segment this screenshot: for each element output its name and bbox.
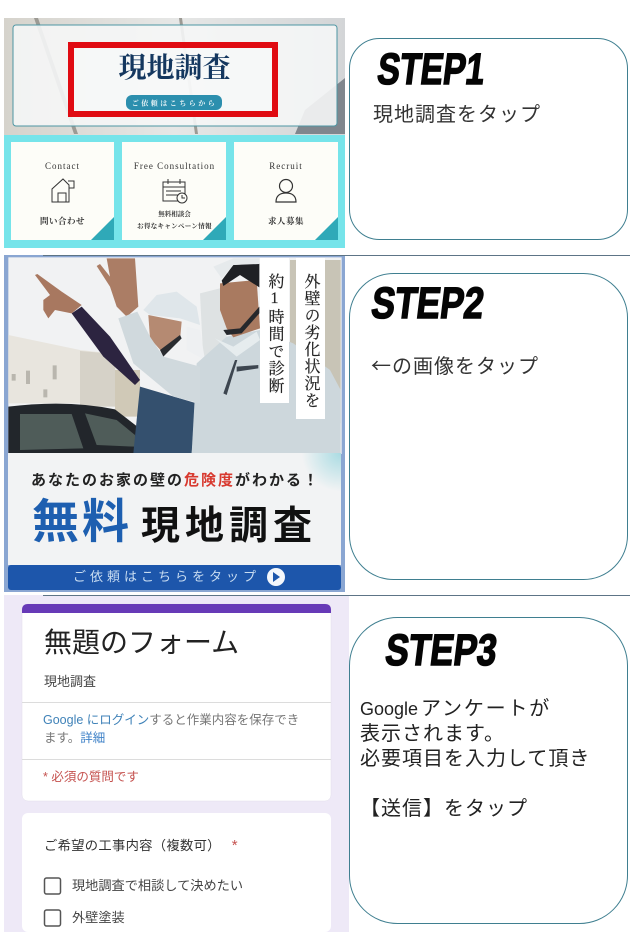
heading: STEP3: STEP3 [383, 626, 500, 675]
icon: house [52, 179, 74, 202]
text: instruction: ←の画像をタップ [371, 350, 539, 379]
banner button [126, 95, 222, 110]
text: instruction: 現地調査をタップ [373, 103, 541, 126]
card: contact: 問い合わせ [40, 216, 85, 226]
vertical label: wall deterioration [296, 258, 325, 419]
vertical label: wall deterioration: 外壁の劣化状況を [302, 273, 320, 409]
headline block: 現地調査 [141, 505, 317, 548]
icon: calendar [163, 179, 187, 203]
banner button: ご依頼はこちらから [132, 98, 217, 108]
text: instructions: 表示されます。 [360, 722, 505, 745]
card: recruit: Recruit [269, 161, 303, 171]
photo: workers pointing [8, 257, 342, 454]
card: contact: Contact [45, 161, 80, 171]
checkbox option 1: 現地調査で相談して決めたい [72, 878, 243, 893]
icon: person [276, 180, 296, 202]
callout: step 1 [350, 38, 628, 240]
call to action bar: ご依頼はこちらをタップ [73, 569, 260, 584]
callout: step 3 [350, 618, 628, 924]
panel: step 3 Google form screenshot [4, 595, 349, 932]
text: instructions: 【送信】をタップ [360, 797, 528, 820]
form header card [22, 604, 331, 801]
hero banner photo [4, 18, 345, 135]
text: instructions: 必要項目を入力して頂き [360, 747, 590, 770]
heading: STEP1: STEP1 [375, 45, 488, 94]
headline block: 無料 [32, 495, 132, 548]
headline block [8, 453, 341, 565]
card: free consultation [122, 142, 226, 240]
vertical label: one hour diagnosis: 約1時間で診断 [266, 273, 284, 394]
headline block: あなたのお家の壁の危険度がわかる！ [31, 471, 320, 489]
checkbox option 2: 外壁塗装 [72, 910, 125, 925]
vertical label: one hour diagnosis [260, 258, 289, 403]
panel: step 2 free survey banner [4, 255, 345, 592]
card: free consultation: Free Consultation [134, 161, 215, 171]
card: recruit: 求人募集 [268, 216, 304, 226]
card: recruit [234, 142, 338, 240]
red highlight box with banner title [71, 45, 275, 114]
text: instructions: Googleアンケートが [360, 697, 551, 720]
form header card: ます。詳細 [44, 730, 105, 745]
card: free consultation: 無料相談会 [158, 209, 191, 218]
form header card: 無題のフォーム [44, 627, 239, 658]
question card [22, 813, 331, 932]
callout: step 2 [350, 274, 628, 580]
form header card: Google にログインすると作業内容を保存でき [43, 712, 299, 727]
form header card: * 必須の質問です [43, 769, 139, 784]
card: contact [11, 142, 114, 240]
red highlight box with banner title: 現地調査 [118, 52, 230, 84]
call to action bar [8, 565, 341, 590]
heading: STEP2: STEP2 [369, 279, 487, 328]
divider lines [43, 256, 630, 596]
icon: play button [267, 568, 285, 586]
card: free consultation: お得なキャンペーン情報 [137, 221, 212, 230]
menu background [4, 135, 345, 248]
form header card: 現地調査 [44, 674, 96, 689]
checkbox option 2 [44, 910, 125, 926]
question card: ご希望の工事内容（複数可） * [44, 837, 238, 854]
panel: step 1 website screenshot [4, 18, 345, 248]
text: instructions [360, 697, 590, 820]
